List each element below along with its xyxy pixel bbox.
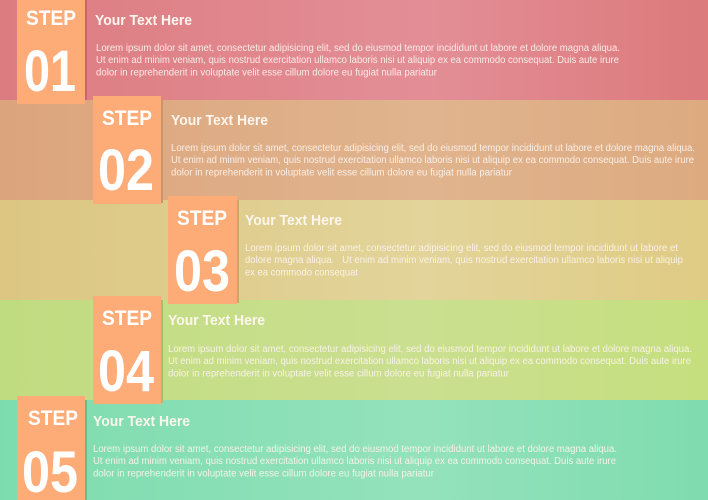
text block: step 5: Ut enim ad minim veniam, quis nostrud exercitation ullamco laboris nisi ut aliquip ex ea commodo consequat. Duis aute irure xyxy=(93,456,617,467)
band 3: yellow background xyxy=(0,200,708,300)
text block: step 2: dolor in reprehenderit in voluptate velit esse cillum dolore eu fugiat nulla pariatur xyxy=(171,168,513,178)
number: 04: 04 xyxy=(98,339,154,404)
text block: step 3: Lorem ipsum dolor sit amet, consectetur adipisicing elit, sed do eiusmod tempor incididunt ut labore et xyxy=(245,243,678,254)
text block: step 1 xyxy=(96,43,620,78)
heading: step 2: Your Text Here xyxy=(171,112,268,129)
panel: step 4 text xyxy=(168,312,692,380)
number: 01: 01 xyxy=(24,39,76,104)
label: STEP 1: STEP xyxy=(26,7,76,30)
number: 03: 03 xyxy=(174,239,230,304)
panel: step 1 text xyxy=(95,12,620,78)
number: 02: 02 xyxy=(98,138,154,203)
card: step 2 xyxy=(93,96,163,204)
text block: step 4: dolor in reprehenderit in voluptate velit esse cillum dolore eu fugiat nulla pariatur xyxy=(168,368,510,380)
card: step 4 xyxy=(93,296,163,404)
text block: step 1: Ut enim ad minim veniam, quis nostrud exercitation ullamco laboris nisi ut aliquip ex ea commodo consequat. Duis aute irure xyxy=(96,55,620,66)
text block: step 3: ex ea commodo consequat xyxy=(245,268,358,278)
band 5: teal background xyxy=(0,400,708,500)
text block: step 3 xyxy=(245,243,684,278)
text block: step 2 xyxy=(171,143,695,178)
text block: step 4 xyxy=(168,344,692,380)
text block: step 4: Ut enim ad minim veniam, quis nostrud exercitation ullamco laboris nisi ut aliquip ex ea commodo consequat. Duis aute irure xyxy=(168,356,692,367)
text block: step 4: Lorem ipsum dolor sit amet, consectetur adipisicing elit, sed do eiusmod tempor incididunt ut labore et dolore magna aliqua. xyxy=(168,344,692,355)
text block: step 1: dolor in reprehenderit in voluptate velit esse cillum dolore eu fugiat nulla pariatur xyxy=(96,68,438,78)
card: step 3 xyxy=(168,196,239,304)
text block: step 5: dolor in reprehenderit in voluptate velit esse cillum dolore eu fugiat nulla pariatur xyxy=(93,468,435,480)
text block: step 3: dolore magna aliqua. Ut enim ad minim veniam, quis nostrud exercitation ullamco laboris nisi ut aliquip xyxy=(245,255,684,266)
card: step 5 xyxy=(17,396,87,500)
heading: step 3: Your Text Here xyxy=(245,212,342,229)
label: STEP 2: STEP xyxy=(102,107,152,130)
text block: step 1: Lorem ipsum dolor sit amet, consectetur adipisicing elit, sed do eiusmod tempor incididunt ut labore et dolore magna aliqua. xyxy=(96,43,620,54)
heading: step 1: Your Text Here xyxy=(95,12,192,29)
band 1: red background xyxy=(0,0,708,100)
heading: step 4: Your Text Here xyxy=(168,312,265,329)
panel: step 5 text xyxy=(93,413,617,480)
label: STEP 3: STEP xyxy=(177,207,227,230)
label: STEP 4: STEP xyxy=(102,307,152,330)
panel: step 3 text xyxy=(245,212,684,278)
text block: step 2: Lorem ipsum dolor sit amet, consectetur adipisicing elit, sed do eiusmod tempor incididunt ut labore et dolore magna aliqua. xyxy=(171,143,695,154)
text block: step 5: Lorem ipsum dolor sit amet, consectetur adipisicing elit, sed do eiusmod tempor incididunt ut labore et dolore magna aliqua. xyxy=(93,444,617,455)
heading: step 5: Your Text Here xyxy=(93,413,190,430)
card: step 1 xyxy=(17,0,87,104)
band 4: green background xyxy=(0,300,708,400)
band 2: orange background xyxy=(0,100,708,200)
text block: step 5 xyxy=(93,444,617,480)
panel: step 2 text xyxy=(171,112,695,178)
label: STEP 5: STEP xyxy=(28,407,78,430)
text block: step 2: Ut enim ad minim veniam, quis nostrud exercitation ullamco laboris nisi ut aliquip ex ea commodo consequat. Duis aute irure xyxy=(171,155,695,166)
